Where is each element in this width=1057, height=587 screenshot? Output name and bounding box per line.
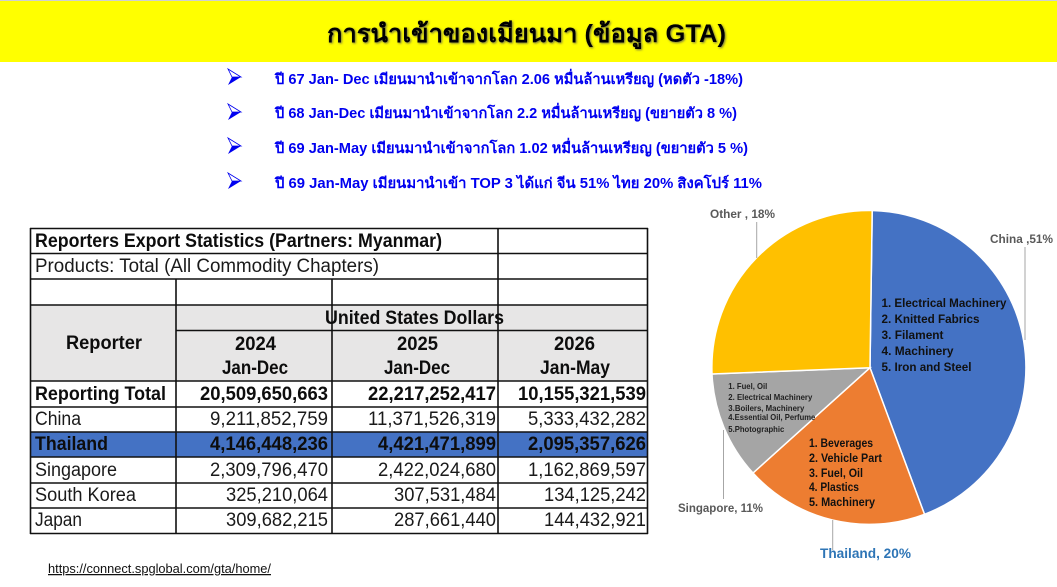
row: Singapore: 2,309,796,470 (210, 460, 328, 481)
bullet 4: ปี 69 Jan-May เมียนมานำเข้า TOP 3 ได้แก่ จีน 51% ไทย 20% สิงคโปร์ 11% (274, 174, 762, 192)
row: Singapore: 2,422,024,680 (378, 460, 496, 481)
row: China: 9,211,852,759 (210, 409, 328, 430)
row: Thailand: Thailand (35, 434, 108, 455)
Singapore products list (728, 381, 816, 434)
label: China: China ,51% (990, 234, 1053, 246)
pie chart (678, 209, 1053, 561)
China products list: 4. Machinery (882, 346, 954, 358)
slice: China (870, 210, 1026, 514)
row: South Korea: 307,531,484 (394, 485, 496, 506)
table titles (35, 231, 442, 277)
slice: Singapore (712, 368, 870, 473)
row: Thailand (35, 434, 646, 455)
table header shading (31, 305, 648, 381)
row: South Korea: South Korea (35, 485, 136, 506)
row: Japan: 287,661,440 (394, 510, 496, 531)
Singapore products list: 5.Photographic (728, 424, 785, 434)
Thailand products list (809, 438, 882, 509)
China products list: 1. Electrical Machinery (882, 298, 1007, 310)
column headers: Jan-Dec (384, 358, 450, 379)
Thailand row highlight (31, 432, 648, 457)
column headers: Reporter (66, 333, 143, 354)
column headers: United States Dollars (325, 308, 504, 329)
row: Reporting Total (35, 384, 646, 405)
title banner: การนำเข้าของเมียนมา (ข้อมูล GTA) (327, 20, 726, 50)
label: Thailand: Thailand, 20% (820, 545, 912, 561)
table titles: Products: Total (All Commodity Chapters) (35, 256, 379, 277)
row: Singapore: Singapore (35, 460, 117, 481)
Singapore products list: 3.Boilers, Machinery (728, 403, 805, 413)
slice: Thailand (753, 368, 924, 524)
row: Japan (35, 510, 646, 531)
row: Reporting Total: 22,217,252,417 (368, 384, 496, 405)
row: China: China (35, 409, 81, 430)
row: Japan: 144,432,921 (544, 510, 646, 531)
column headers: Jan-Dec (222, 358, 288, 379)
row: Thailand: 4,421,471,899 (378, 434, 496, 455)
title banner (0, 1, 1057, 62)
row: Japan: 309,682,215 (226, 510, 328, 531)
Thailand products list: 4. Plastics (809, 482, 859, 494)
row: Singapore (35, 460, 646, 481)
statistics table (30, 228, 648, 534)
China products list: 5. Iron and Steel (882, 362, 972, 374)
row: South Korea: 134,125,242 (544, 485, 646, 506)
Thailand products list: 3. Fuel, Oil (809, 468, 863, 480)
row: China (35, 409, 646, 430)
column headers: Jan-May (540, 358, 610, 379)
row: Thailand: 4,146,448,236 (210, 434, 328, 455)
row: Japan: Japan (35, 510, 82, 531)
Thailand products list: 2. Vehicle Part (809, 453, 882, 465)
bullet 1: ปี 67 Jan- Dec เมียนมานำเข้าจากโลก 2.06 หมื่นล้านเหรียญ (หดตัว -18%) (274, 68, 743, 88)
China products list: 3. Filament (882, 330, 944, 342)
column headers: 2025 (397, 334, 438, 355)
Thailand products list: 1. Beverages (809, 438, 873, 450)
Singapore products list: 2. Electrical Machinery (728, 392, 813, 402)
table titles: Reporters Export Statistics (Partners: Myanmar) (35, 231, 442, 252)
source link: https://connect.spglobal.com/gta/home/ (48, 562, 272, 576)
row: Thailand: 2,095,357,626 (528, 434, 646, 455)
row: South Korea: 325,210,064 (226, 485, 328, 506)
China products list: 2. Knitted Fabrics (882, 314, 980, 326)
column headers: 2026 (554, 334, 595, 355)
label: Other: Other , 18% (710, 209, 775, 221)
column headers: 2024 (235, 334, 276, 355)
row: Singapore: 1,162,869,597 (528, 460, 646, 481)
bullet 3: ปี 69 Jan-May เมียนมานำเข้าจากโลก 1.02 หมื่นล้านเหรียญ (ขยายตัว 5 %) (274, 137, 748, 157)
row: Reporting Total: 20,509,650,663 (200, 384, 328, 405)
row: Reporting Total: 10,155,321,539 (518, 384, 646, 405)
China products list (882, 298, 1007, 374)
bullet 2: ปี 68 Jan-Dec เมียนมานำเข้าจากโลก 2.2 หมื่นล้านเหรียญ (ขยายตัว 8 %) (274, 102, 737, 122)
label: Singapore: Singapore, 11% (678, 503, 763, 515)
row: South Korea (35, 485, 646, 506)
row: China: 11,371,526,319 (368, 409, 496, 430)
slice: Other (712, 210, 872, 374)
Singapore products list: 4.Essential Oil, Perfume (728, 412, 816, 422)
Singapore products list: 1. Fuel, Oil (728, 381, 767, 391)
column headers (66, 308, 610, 379)
bullet list (228, 68, 762, 192)
row: China: 5,333,432,282 (528, 409, 646, 430)
row: Reporting Total: Reporting Total (35, 384, 166, 405)
Thailand products list: 5. Machinery (809, 497, 876, 509)
